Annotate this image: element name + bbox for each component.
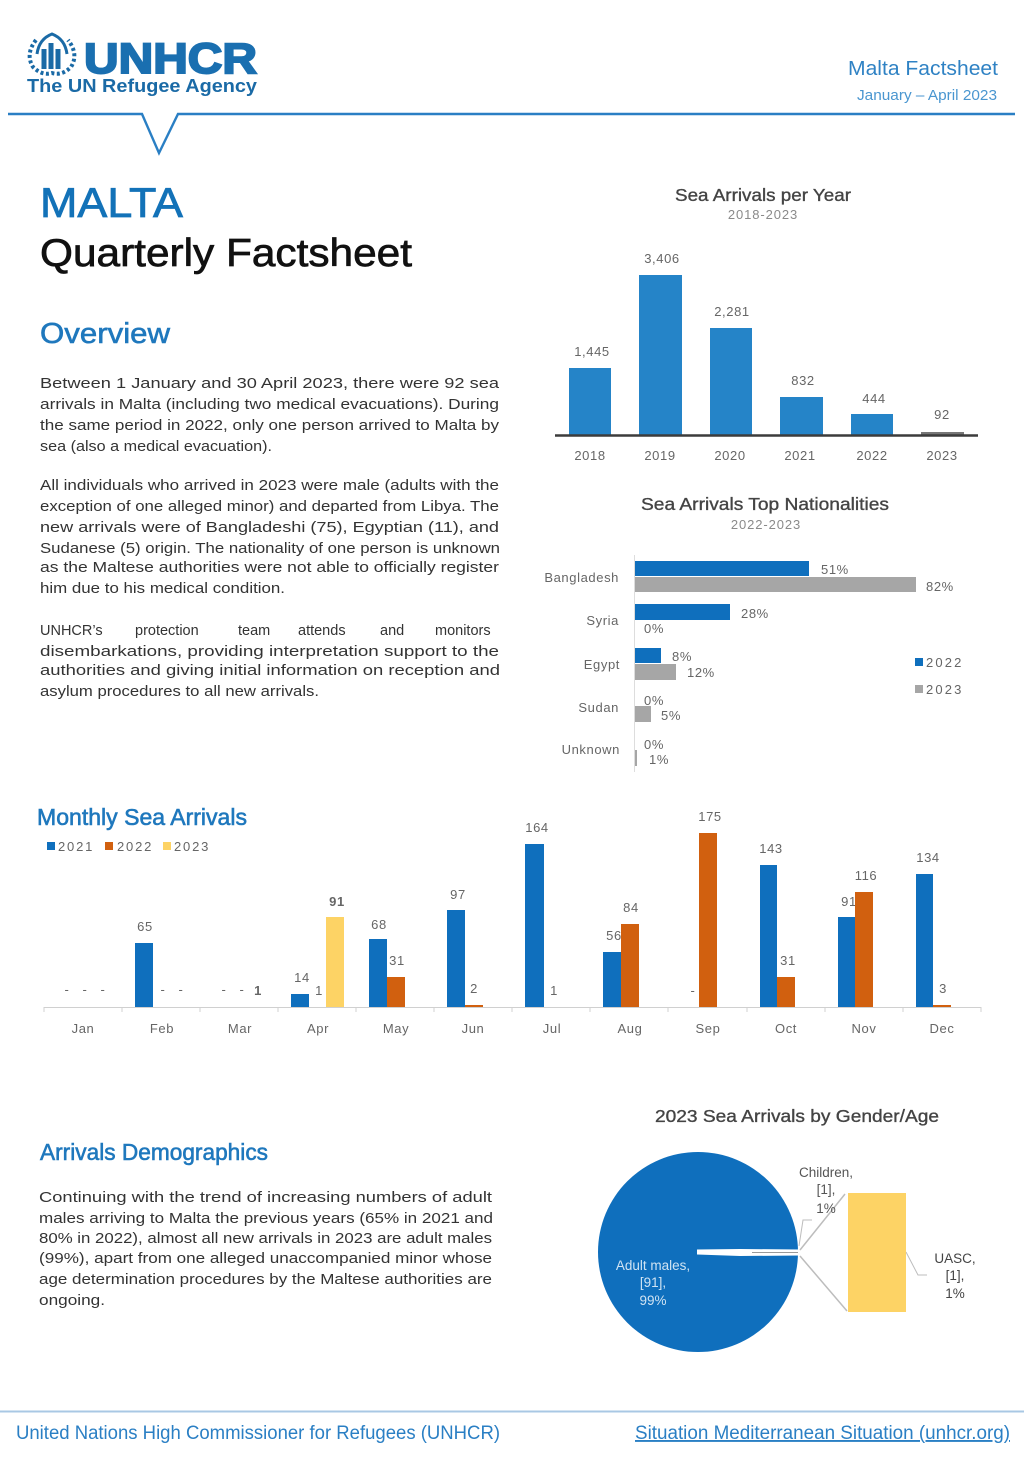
bar chart: sea arrivals per year: 2021 xyxy=(784,448,816,463)
bar chart: monthly sea arrivals: 91 xyxy=(329,894,345,909)
bar chart: monthly sea arrivals: Apr xyxy=(307,1021,329,1036)
bar chart: monthly sea arrivals: 116 xyxy=(855,868,877,883)
text block: overview paragraph 2: him due to his medical condition. xyxy=(40,581,285,597)
bar chart: monthly sea arrivals: - xyxy=(101,982,105,997)
text block: demographics: (99%), apart from one alleged unaccompanied minor whose xyxy=(39,1251,492,1267)
pie chart: arrivals by gender and age: [1], xyxy=(946,1268,964,1283)
text block: overview paragraph 3: attends xyxy=(298,623,346,639)
chart title: 2018-2023 xyxy=(728,207,798,222)
text block: overview paragraph 3: UNHCR’s xyxy=(40,623,103,639)
bar chart: top nationalities: 28% xyxy=(741,606,769,621)
bar chart: monthly sea arrivals: - xyxy=(83,982,87,997)
heading: overview: Overview xyxy=(40,318,171,350)
header: UNHCR logo: UNHCR xyxy=(84,35,257,83)
bar chart: monthly sea arrivals xyxy=(37,804,981,1036)
text block: overview paragraph 1: sea (also a medical evacuation). xyxy=(40,439,272,455)
bar chart: monthly sea arrivals: - xyxy=(65,982,69,997)
pie chart: arrivals by gender and age: 1% xyxy=(945,1286,965,1301)
bar chart: sea arrivals per year xyxy=(555,185,978,463)
bar chart: monthly sea arrivals: 164 xyxy=(525,820,549,835)
bar chart: top nationalities: 12% xyxy=(687,665,715,680)
legend: 2023 xyxy=(926,682,962,697)
bar chart: top nationalities: 1% xyxy=(649,752,669,767)
text block: demographics: males arriving to Malta the previous years (65% in 2021 and xyxy=(39,1211,493,1227)
pie chart: arrivals by gender and age: Adult males, xyxy=(616,1258,690,1273)
text block: overview paragraph 1: Between 1 January and 30 April 2023, there were 92 sea xyxy=(40,376,500,392)
bar chart: monthly sea arrivals: - xyxy=(179,982,183,997)
bar chart: monthly sea arrivals: 56 xyxy=(606,928,622,943)
bar chart: monthly sea arrivals: Mar xyxy=(228,1021,252,1036)
pie chart: arrivals by gender and age: 99% xyxy=(639,1293,667,1308)
bar chart: monthly sea arrivals: Sep xyxy=(696,1021,720,1036)
text block: demographics: Continuing with the trend of increasing numbers of adult xyxy=(39,1190,492,1206)
bar chart: monthly sea arrivals: Dec xyxy=(930,1021,954,1036)
text block: overview paragraph 1: the same period in 2022, only one person arrived to Malta by xyxy=(40,418,500,434)
bar chart: top nationalities: 82% xyxy=(926,579,954,594)
pie chart: arrivals by gender and age: Children, xyxy=(799,1165,853,1180)
bar chart: top nationalities: 51% xyxy=(821,562,849,577)
text block: overview paragraph 3: disembarkations, providing interpretation support to the xyxy=(40,644,499,660)
bar chart: sea arrivals per year: 2020 xyxy=(714,448,746,463)
chart title: Sea Arrivals per Year xyxy=(675,185,851,205)
text block: overview paragraph 3: protection xyxy=(135,623,199,639)
bar chart: monthly sea arrivals: - xyxy=(691,983,695,998)
bar chart: sea arrivals per year: 832 xyxy=(791,373,815,388)
bar chart: sea arrivals per year: 1,445 xyxy=(574,344,610,359)
bar chart: sea arrivals per year: 2018 xyxy=(574,448,606,463)
text block: overview paragraph 3 xyxy=(40,623,500,700)
pie chart: arrivals by gender and age: [1], xyxy=(817,1182,835,1197)
bar chart: top nationalities: Bangladesh xyxy=(544,570,619,585)
chart title xyxy=(675,185,851,222)
text block: overview paragraph 2: as the Maltese authorities were not able to officially register xyxy=(40,560,499,576)
text block: overview paragraph 3: asylum procedures to all new arrivals. xyxy=(40,684,319,700)
chart title: 2023 Sea Arrivals by Gender/Age xyxy=(655,1106,939,1126)
bar chart: monthly sea arrivals: May xyxy=(383,1021,409,1036)
bar chart: monthly sea arrivals: Feb xyxy=(150,1021,174,1036)
legend: 2022 xyxy=(926,655,962,670)
header: UNHCR logo: The UN Refugee Agency xyxy=(27,75,258,96)
text block: demographics xyxy=(39,1190,493,1309)
icon: UNHCR emblem xyxy=(30,34,74,74)
bar chart: top nationalities: Sudan xyxy=(578,700,619,715)
legend: 2021 xyxy=(58,839,93,854)
legend: 2022 xyxy=(117,839,152,854)
connector lines xyxy=(800,1194,847,1311)
header: document title xyxy=(848,57,998,104)
text block: overview paragraph 3: team xyxy=(238,623,270,639)
bar chart: sea arrivals per year: 92 xyxy=(934,407,950,422)
pie chart: arrivals by gender and age xyxy=(598,1106,976,1352)
bar chart: monthly sea arrivals: Aug xyxy=(618,1021,642,1036)
heading: monthly sea arrivals: Monthly Sea Arrivals xyxy=(37,804,247,830)
header: document title: Malta Factsheet xyxy=(848,57,998,80)
bar chart: sea arrivals per year: 444 xyxy=(862,391,886,406)
bar chart: monthly sea arrivals: - xyxy=(240,982,244,997)
text block: overview paragraph 1 xyxy=(40,376,500,455)
title: MALTA xyxy=(40,179,183,226)
bar chart: monthly sea arrivals: Oct xyxy=(775,1021,797,1036)
bar chart: monthly sea arrivals: 65 xyxy=(137,919,153,934)
bar chart: monthly sea arrivals: Nov xyxy=(852,1021,876,1036)
bar chart: monthly sea arrivals: 84 xyxy=(623,900,639,915)
title: Quarterly Factsheet xyxy=(40,232,412,275)
pie chart: arrivals by gender and age: [91], xyxy=(640,1275,666,1290)
title xyxy=(40,179,412,275)
bar chart: monthly sea arrivals: 31 xyxy=(780,953,796,968)
bar chart: top nationalities: Unknown xyxy=(562,742,620,757)
heading: arrivals demographics: Arrivals Demographics xyxy=(40,1139,268,1165)
bar chart: sea arrivals per year: 2019 xyxy=(644,448,676,463)
bar chart: monthly sea arrivals: Jan xyxy=(72,1021,94,1036)
bar chart: monthly sea arrivals: Jun xyxy=(462,1021,484,1036)
header: UNHCR logo xyxy=(27,34,258,96)
pie chart: arrivals by gender and age: 1% xyxy=(816,1201,836,1216)
header rule with pointer xyxy=(8,114,1015,153)
bar chart: monthly sea arrivals: 175 xyxy=(698,809,722,824)
bar chart: monthly sea arrivals: 2 xyxy=(470,981,478,996)
bar chart: top nationalities: 0% xyxy=(644,693,664,708)
chart title xyxy=(641,494,889,532)
text block: demographics: 80% in 2022), almost all new arrivals in 2023 are adult males xyxy=(39,1231,492,1247)
bar chart: monthly sea arrivals: 1 xyxy=(315,983,323,998)
bar chart: monthly sea arrivals: 31 xyxy=(389,953,405,968)
text block: overview paragraph 3: monitors xyxy=(435,623,491,639)
chart title: 2022-2023 xyxy=(731,517,801,532)
bar chart: top nationalities xyxy=(544,494,962,772)
chart title: Sea Arrivals Top Nationalities xyxy=(641,494,889,514)
text block: overview paragraph 3: authorities and giving initial information on reception and xyxy=(40,663,500,679)
footer xyxy=(0,1412,1024,1444)
legend xyxy=(915,655,962,697)
footer: United Nations High Commissioner for Refugees (UNHCR) xyxy=(16,1423,500,1444)
bar chart: monthly sea arrivals: - xyxy=(161,982,165,997)
footer: Situation Mediterranean Situation (unhcr.org) xyxy=(635,1423,1010,1444)
bar chart: monthly sea arrivals: 91 xyxy=(841,894,857,909)
bar chart: monthly sea arrivals: 1 xyxy=(550,983,558,998)
text block: overview paragraph 2: Sudanese (5) origin. The nationality of one person is unknown xyxy=(40,541,500,557)
bar chart: top nationalities: 0% xyxy=(644,621,664,636)
bar chart: top nationalities: 5% xyxy=(661,708,681,723)
text block: demographics: ongoing. xyxy=(39,1293,105,1309)
text block: overview paragraph 2 xyxy=(40,478,500,597)
bar chart: monthly sea arrivals: Jul xyxy=(543,1021,561,1036)
legend: 2023 xyxy=(174,839,209,854)
bar chart: monthly sea arrivals: - xyxy=(222,982,226,997)
bar chart: top nationalities: 0% xyxy=(644,737,664,752)
text block: overview paragraph 2: exception of one alleged minor) and departed from Libya. The xyxy=(40,499,499,515)
bar chart: monthly sea arrivals: 1 xyxy=(254,983,262,998)
uasc bar xyxy=(848,1193,906,1312)
legend xyxy=(47,839,209,854)
bar chart: sea arrivals per year: 2022 xyxy=(856,448,888,463)
bar chart: top nationalities: Egypt xyxy=(584,657,620,672)
bar chart: monthly sea arrivals: 97 xyxy=(450,887,466,902)
bar chart: monthly sea arrivals: 14 xyxy=(294,970,310,985)
text block: demographics: age determination procedures by the Maltese authorities are xyxy=(39,1272,492,1288)
text block: overview paragraph 3: and xyxy=(380,623,404,639)
bar chart: top nationalities: 8% xyxy=(672,649,692,664)
bar chart: monthly sea arrivals: 68 xyxy=(371,917,387,932)
bar chart: monthly sea arrivals: 134 xyxy=(916,850,940,865)
text block: overview paragraph 1: arrivals in Malta (including two medical evacuations). During xyxy=(40,397,499,413)
text block: overview paragraph 2: new arrivals were of Bangladeshi (75), Egyptian (11), and xyxy=(40,520,499,536)
bar chart: monthly sea arrivals: 3 xyxy=(939,981,947,996)
bar chart: sea arrivals per year: 2,281 xyxy=(714,304,750,319)
bar chart: top nationalities: Syria xyxy=(586,613,619,628)
bar chart: sea arrivals per year: 3,406 xyxy=(644,251,680,266)
text block: overview paragraph 2: All individuals who arrived in 2023 were male (adults with the xyxy=(40,478,499,494)
bar chart: monthly sea arrivals: 143 xyxy=(759,841,783,856)
pie chart: arrivals by gender and age: UASC, xyxy=(934,1251,976,1266)
header: document title: January – April 2023 xyxy=(857,88,997,104)
bar chart: sea arrivals per year: 2023 xyxy=(926,448,958,463)
